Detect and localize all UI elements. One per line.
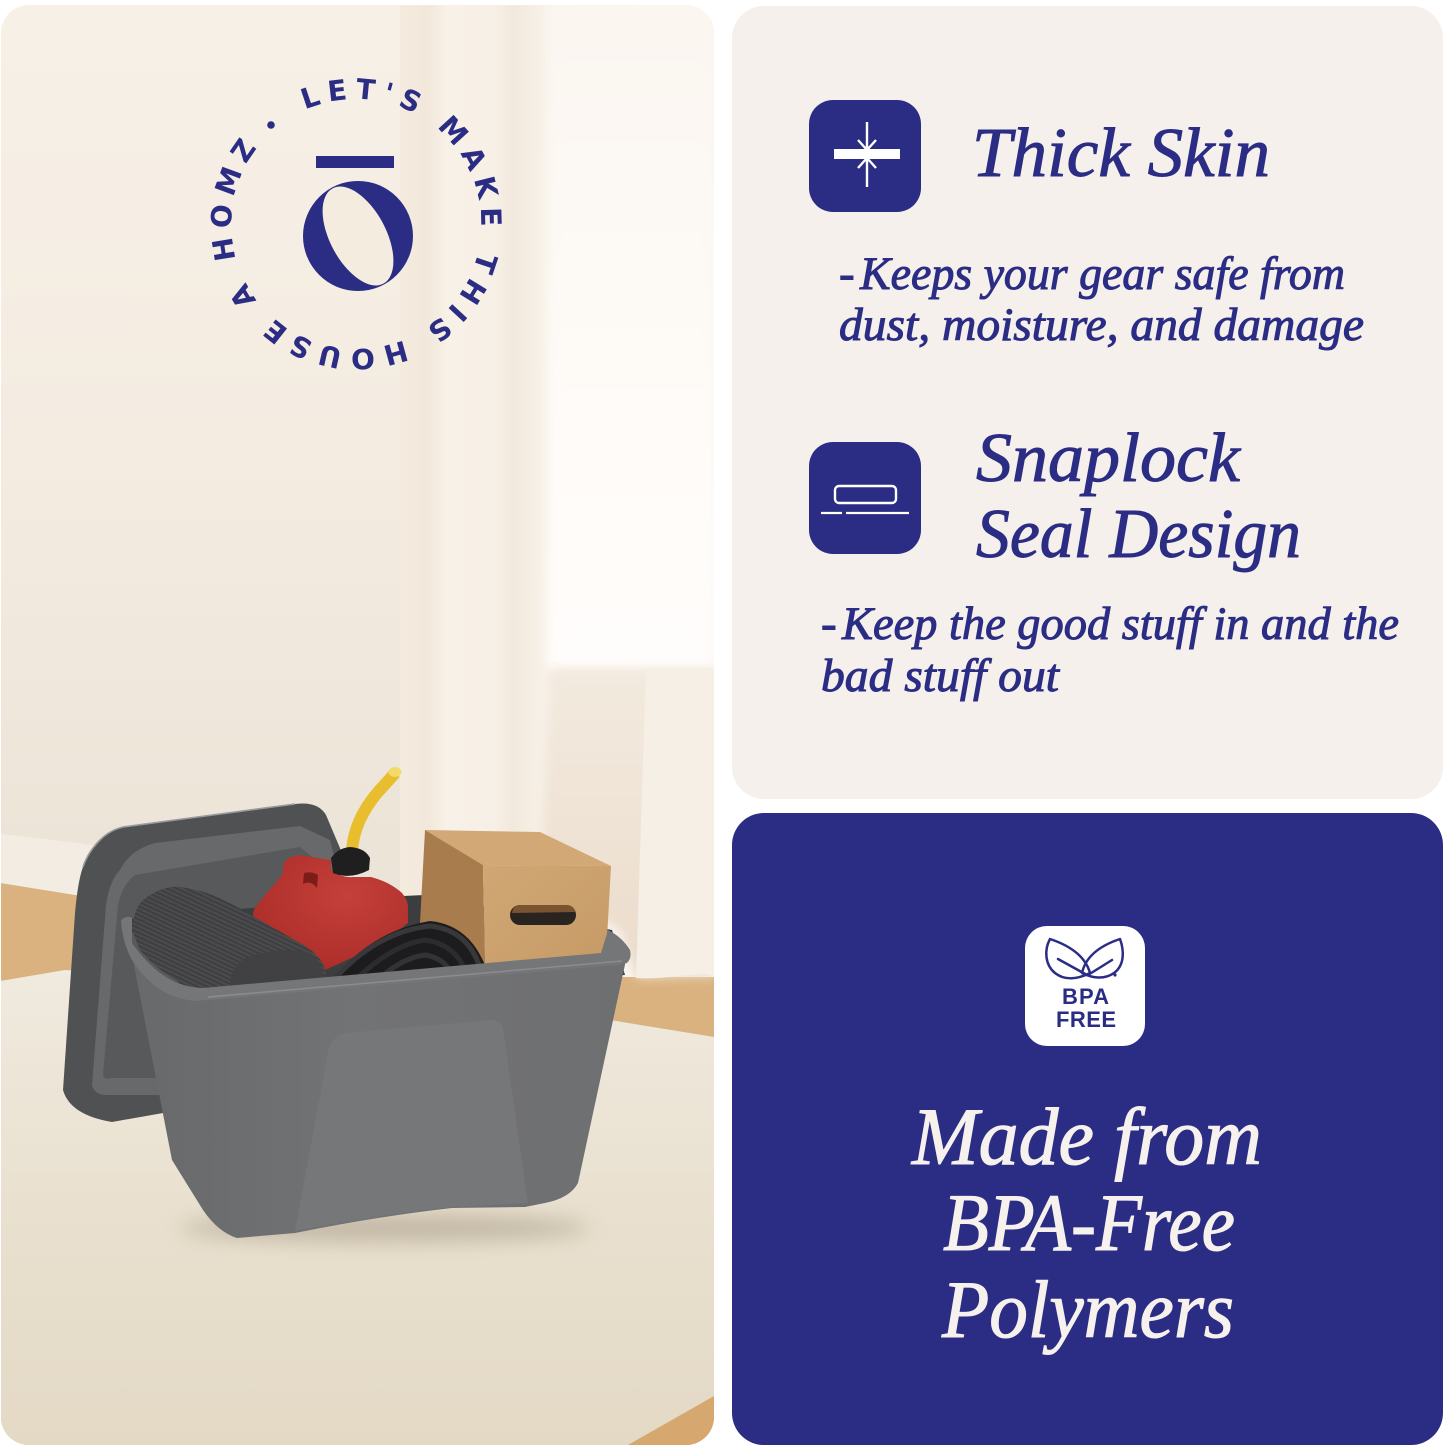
heading: Made from BPA-Free Polymers [911, 1091, 1262, 1355]
text: snaplock description: bad stuff out [821, 650, 1060, 702]
icon: BPA free badge: FREE [1056, 1007, 1116, 1032]
circular slogan text: LET'S MAKE THIS HOUSE A HOMZ [210, 78, 502, 370]
coiled hose [341, 921, 484, 976]
heading: Snaplock Seal Design: Seal Design [976, 496, 1301, 573]
text: thick skin description: Keeps your gear safe from [859, 248, 1345, 300]
text: snaplock description: Keep the good stuff in and the [841, 598, 1399, 650]
bin interior [132, 895, 625, 986]
text: snaplock description [821, 598, 1399, 702]
heading: Made from BPA-Free Polymers: BPA-Free [943, 1177, 1235, 1268]
embossed front panel [295, 1020, 528, 1231]
icon: snaplock seal [809, 442, 921, 554]
lid [63, 803, 345, 1122]
knit towel [132, 887, 326, 992]
heading: Thick Skin: Thick Skin [972, 115, 1270, 192]
panel: product photo [0, 0, 720, 1445]
heading: Snaplock Seal Design [976, 420, 1301, 573]
cardboard box [420, 830, 611, 972]
logo ring [303, 175, 413, 297]
wood corner [628, 1396, 714, 1445]
heading: Made from BPA-Free Polymers: Polymers [941, 1264, 1234, 1355]
logo bar [316, 156, 394, 168]
icon: BPA free badge [1025, 926, 1145, 1046]
spout [352, 773, 395, 850]
text: snaplock description: - [821, 598, 837, 650]
wall background [1, 5, 400, 891]
icon: thick skin [809, 100, 921, 212]
text: thick skin description [839, 248, 1364, 351]
panel: features [732, 6, 1443, 799]
icon: BPA free badge: BPA [1062, 984, 1109, 1009]
text: thick skin description: dust, moisture, and damage [839, 299, 1364, 351]
fuel can [253, 855, 408, 970]
panel: BPA free [732, 813, 1443, 1445]
text: thick skin description: - [839, 248, 855, 300]
bin body [132, 955, 626, 1238]
logo dot [267, 121, 275, 129]
rug [0, 970, 714, 1445]
bin shadow [180, 1214, 590, 1242]
heading: Snaplock Seal Design: Snaplock [976, 420, 1242, 497]
illustration: storage bin with items [63, 767, 631, 1238]
baseboard [1, 834, 94, 895]
logo: circular badge [210, 78, 502, 370]
bin rim [121, 917, 631, 1001]
curtain [400, 5, 714, 978]
wood floor [0, 883, 720, 1445]
can cap [331, 847, 370, 876]
heading: Made from BPA-Free Polymers: Made from [911, 1091, 1262, 1182]
